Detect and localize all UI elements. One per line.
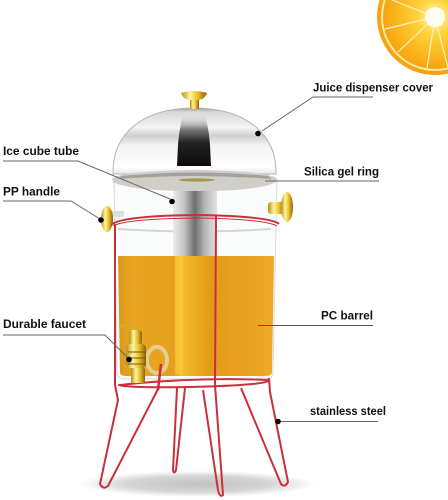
callout: Durable faucet: Durable faucet: [3, 317, 86, 331]
barrel: [114, 180, 277, 379]
lid knob: [181, 91, 207, 109]
callout: PC barrel: PC barrel: [321, 308, 373, 322]
callout: PC barrel: [258, 308, 373, 326]
floor shadow: [80, 471, 316, 497]
callout: Juice dispenser cover: [255, 80, 433, 136]
right handle: [268, 192, 293, 222]
callout: PP handle: PP handle: [3, 184, 60, 198]
callout: Silica gel ring: [265, 164, 379, 181]
callout: Silica gel ring: Silica gel ring: [304, 164, 379, 178]
callout: Durable faucet: [3, 317, 132, 362]
callout: Juice dispenser cover: Juice dispenser cover: [313, 80, 433, 94]
callout: PP handle: [3, 184, 104, 223]
durable faucet: [119, 325, 167, 390]
juice: [118, 256, 274, 376]
callout: stainless steel: [275, 404, 386, 424]
red wire stand: [100, 215, 288, 496]
callout: Ice cube tube: Ice cube tube: [3, 144, 79, 158]
callout: stainless steel: stainless steel: [310, 404, 386, 418]
icon: orange slice: [377, 0, 448, 75]
left handle: [101, 206, 124, 232]
ice cube tube: [173, 184, 217, 374]
dome cover: [113, 108, 276, 174]
callout: Ice cube tube: [3, 144, 175, 204]
silica gel ring: [112, 170, 277, 191]
